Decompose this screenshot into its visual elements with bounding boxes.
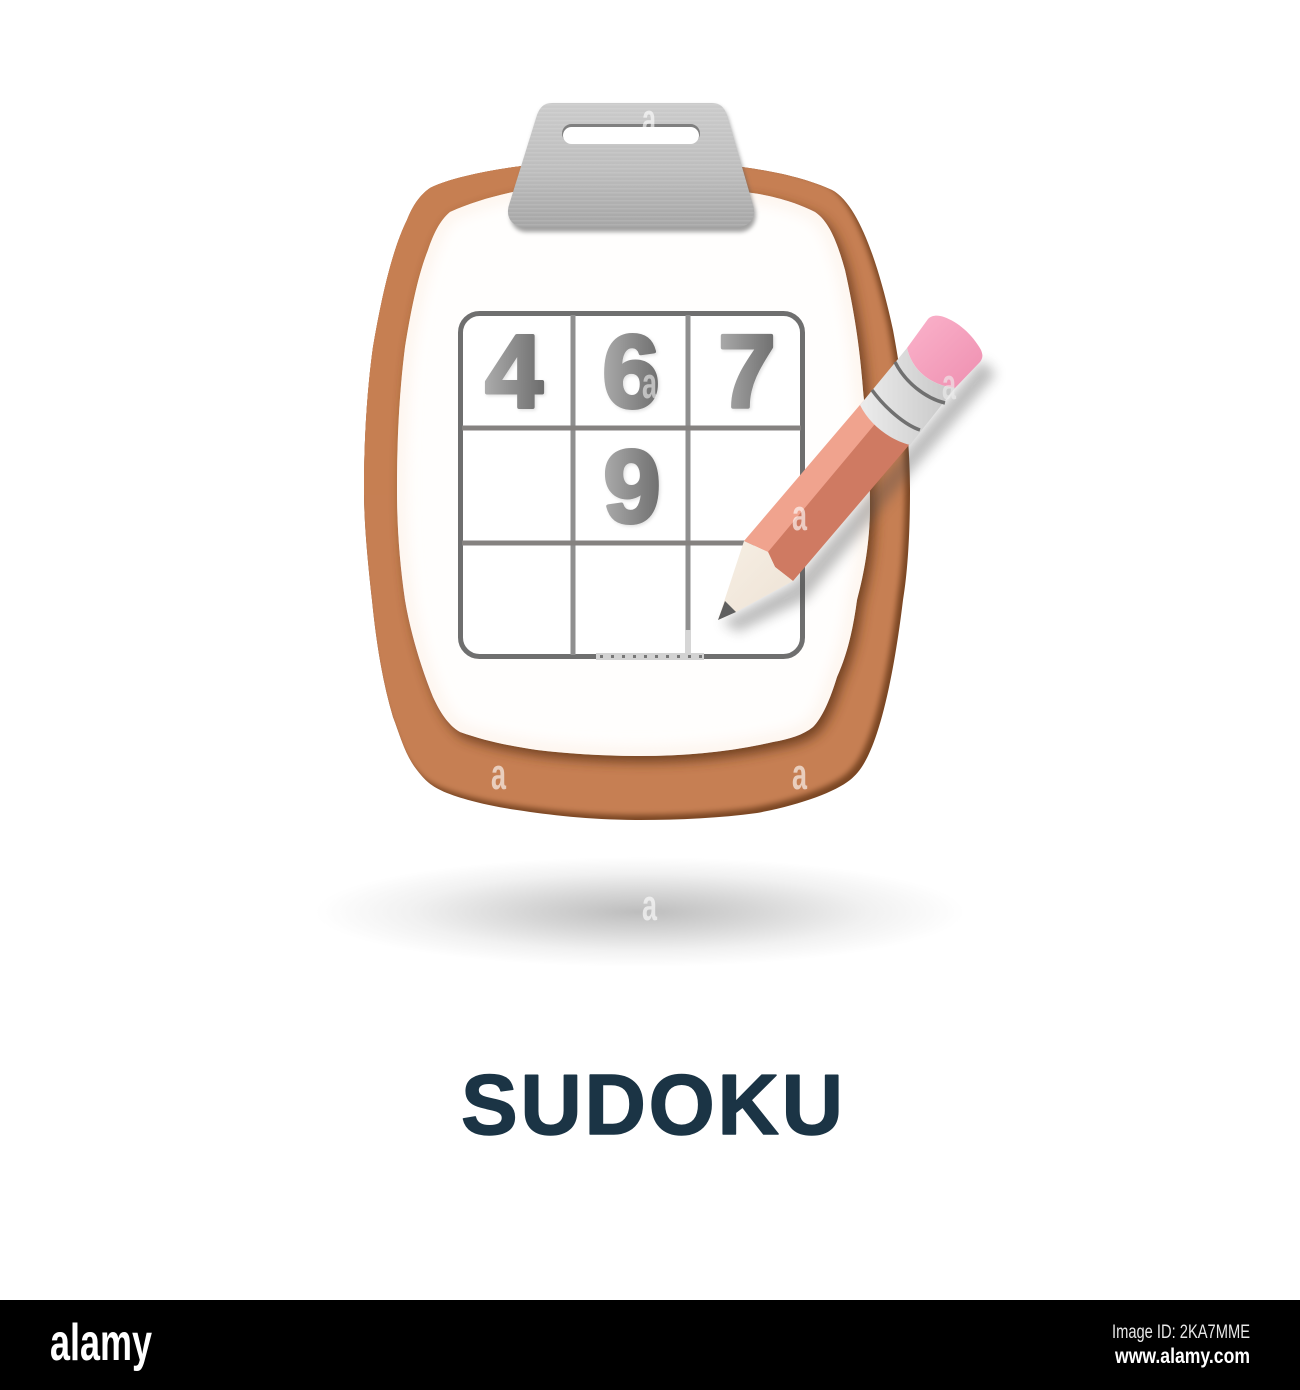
pencil ferrule bbox=[860, 348, 955, 445]
stock watermarks: a bbox=[642, 881, 657, 930]
stock watermarks: a bbox=[642, 359, 657, 408]
clip shadow bbox=[510, 106, 756, 232]
footer background bbox=[0, 1300, 1300, 1390]
paper edge glow bbox=[397, 186, 870, 756]
digit 4: 4 bbox=[485, 314, 543, 429]
stock watermarks: a bbox=[792, 491, 807, 540]
grid lines bbox=[462, 315, 801, 655]
sudoku grid bbox=[460, 314, 802, 660]
stock watermarks: a bbox=[642, 95, 656, 144]
alamy logo: alamy bbox=[50, 1314, 152, 1372]
image id: Image ID: 2KA7MME bbox=[1112, 1322, 1250, 1343]
board face and paper shadow bbox=[359, 155, 905, 815]
pencil lead bbox=[718, 601, 736, 620]
printing artifact on grid bbox=[596, 630, 704, 660]
ferrule bands bbox=[872, 362, 945, 430]
grid cells background bbox=[460, 314, 802, 656]
pencil body light facet bbox=[744, 399, 885, 553]
stock watermarks: a bbox=[491, 750, 506, 799]
title: SUDOKU bbox=[461, 1058, 843, 1153]
pencil wood tip bbox=[718, 541, 793, 620]
ground shadow bbox=[315, 857, 965, 967]
metal clip bbox=[508, 103, 756, 232]
paper sheet bbox=[397, 186, 870, 756]
pencil shadow bbox=[722, 360, 996, 632]
footer bar bbox=[0, 1300, 1300, 1390]
pencil body dark facet bbox=[768, 418, 915, 581]
website: www.alamy.com bbox=[1114, 1345, 1250, 1368]
stock watermarks: a bbox=[792, 750, 807, 799]
stock watermarks bbox=[491, 95, 956, 930]
stock watermarks: a bbox=[942, 360, 956, 409]
pencil bbox=[718, 316, 996, 632]
clipboard bbox=[359, 155, 910, 820]
clip body bbox=[508, 103, 754, 227]
digit 7: 7 bbox=[718, 314, 776, 429]
digit 9: 9 bbox=[603, 429, 661, 544]
clipboard board dark underlayer bbox=[364, 160, 910, 820]
clip slot bbox=[562, 124, 700, 144]
eraser bbox=[907, 316, 982, 388]
digit 6: 6 bbox=[602, 314, 660, 429]
clip stripes bbox=[508, 103, 754, 227]
